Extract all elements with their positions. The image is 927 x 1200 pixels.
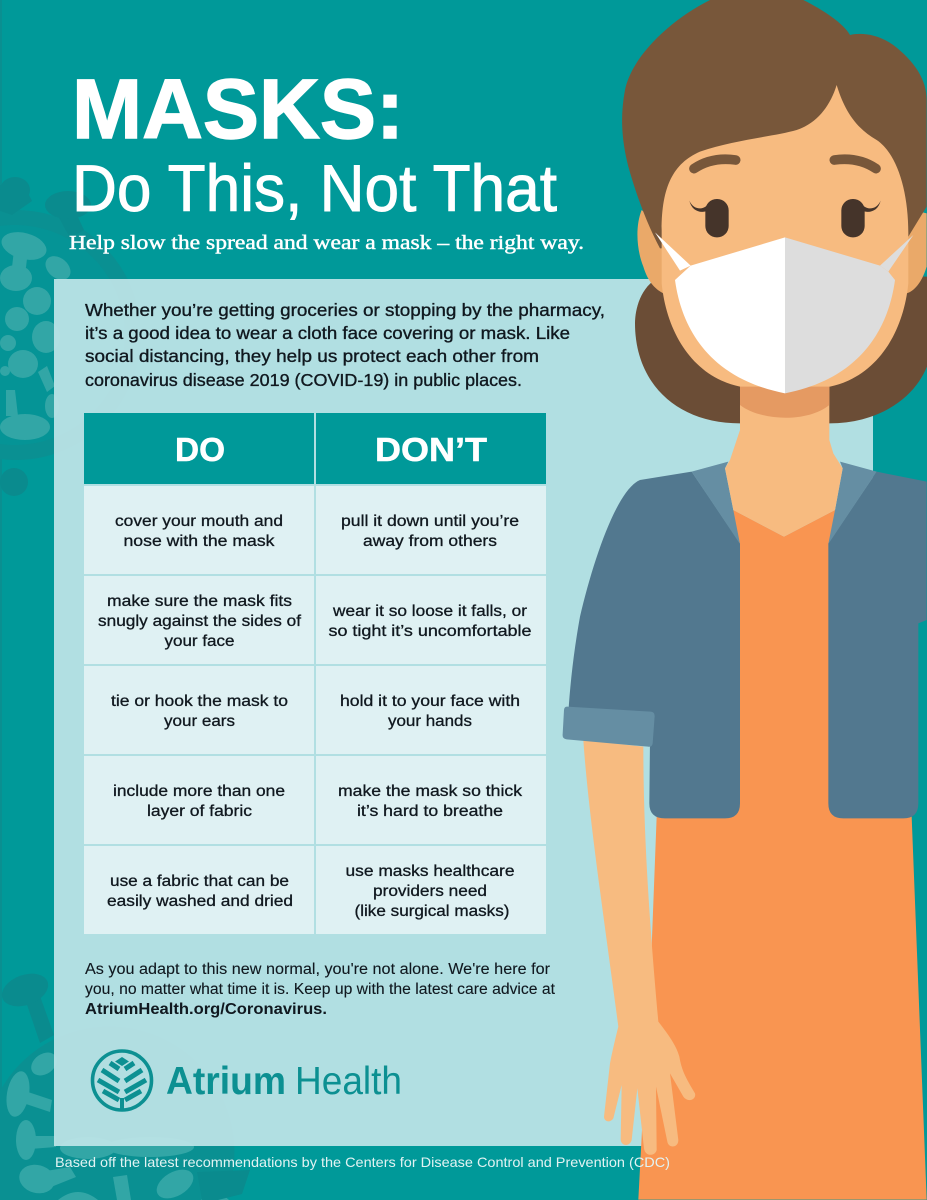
jacket cuff (563, 707, 655, 747)
row 4 do: layer of fabric (147, 803, 252, 820)
closing paragraph: As you adapt to this new normal, you're not alone. We're here for (85, 961, 550, 978)
row 1 don't (316, 486, 546, 574)
dress (638, 510, 927, 1200)
panel: light teal content background (54, 279, 873, 1146)
footer note: Based off the latest recommendations by the Centers for Disease Control and Prevention (CDC) (55, 1155, 670, 1170)
closing paragraph: AtriumHealth.org/Coronavirus. (85, 1001, 327, 1018)
intro paragraph: coronavirus disease 2019 (COVID-19) in public places. (85, 370, 522, 390)
row 4 do (84, 756, 314, 844)
front hair (622, 0, 927, 248)
row 4 don't: it’s hard to breathe (357, 803, 503, 820)
row 5 don't: providers need (373, 883, 487, 900)
closing paragraph: you, no matter what time it is. Keep up with the latest care advice at (85, 981, 556, 998)
face (662, 85, 908, 387)
header: DO: DO (175, 431, 225, 468)
table: do and don't (84, 413, 546, 934)
neck shadow (740, 383, 829, 418)
logo: Atrium Health (92, 1051, 402, 1111)
row 3 don't: your hands (388, 713, 472, 730)
illustration: woman wearing mask (563, 0, 927, 1200)
neck (725, 367, 843, 537)
eyebrows (694, 159, 876, 169)
header: DON'T: DON’T (375, 431, 487, 468)
wordmark: Health: Health (295, 1060, 402, 1103)
row 2 do: your face (164, 633, 234, 650)
jacket lapel left (692, 462, 740, 544)
intro paragraph: Whether you’re getting groceries or stopping by the pharmacy, (85, 300, 605, 320)
back hair (635, 277, 927, 423)
jacket left (568, 472, 740, 818)
row 5 don't (316, 846, 546, 934)
title: MASKS: MASKS: (72, 62, 404, 156)
jacket lapel right (828, 462, 877, 544)
heading: Do This, Not That: Do This, Not That (72, 151, 557, 225)
background virus: top left (0, 177, 141, 496)
ear left (637, 210, 670, 293)
ear right (900, 210, 927, 293)
intro paragraph: it’s a good idea to wear a cloth face covering or mask. Like (85, 323, 570, 343)
row 1 do: nose with the mask (124, 533, 275, 550)
row 2 don't: wear it so loose it falls, or (332, 603, 527, 620)
intro paragraph (85, 300, 605, 390)
background virus: bottom left (0, 968, 250, 1200)
row 1 don't: away from others (363, 533, 497, 550)
header: DO (84, 413, 314, 484)
icon: Atrium leaf emblem (92, 1051, 152, 1111)
wordmark: Atrium: Atrium (166, 1060, 286, 1103)
row 3 don't (316, 666, 546, 754)
row 2 do: snugly against the sides of (98, 613, 302, 630)
row 2 don't: so tight it’s uncomfortable (328, 623, 532, 640)
row 5 do (84, 846, 314, 934)
closing paragraph (85, 961, 556, 1018)
intro paragraph: social distancing, they help us protect each other from (85, 346, 539, 366)
jacket right (828, 472, 927, 818)
subtitle: Help slow the spread and wear a mask – the right way. (69, 232, 584, 254)
row 3 do (84, 666, 314, 754)
row 3 do: tie or hook the mask to (111, 693, 288, 710)
row 1 don't: pull it down until you’re (341, 513, 519, 530)
row 2 do: make sure the mask fits (107, 593, 292, 610)
row 3 do: your ears (164, 713, 235, 730)
row 2 don't (316, 576, 546, 664)
mask (655, 232, 913, 393)
header: DON'T (316, 413, 546, 484)
row 1 do (84, 486, 314, 574)
row 4 do: include more than one (113, 783, 285, 800)
arm and hand (583, 740, 695, 1155)
row 2 do (84, 576, 314, 664)
eyes (689, 199, 881, 237)
row 5 don't: use masks healthcare (346, 863, 514, 880)
row 4 don't: make the mask so thick (338, 783, 522, 800)
row 3 don't: hold it to your face with (340, 693, 520, 710)
row 4 don't (316, 756, 546, 844)
row 5 do: easily washed and dried (107, 893, 293, 910)
row 5 don't: (like surgical masks) (354, 903, 510, 920)
row 1 do: cover your mouth and (115, 513, 283, 530)
row 5 do: use a fabric that can be (110, 873, 289, 890)
